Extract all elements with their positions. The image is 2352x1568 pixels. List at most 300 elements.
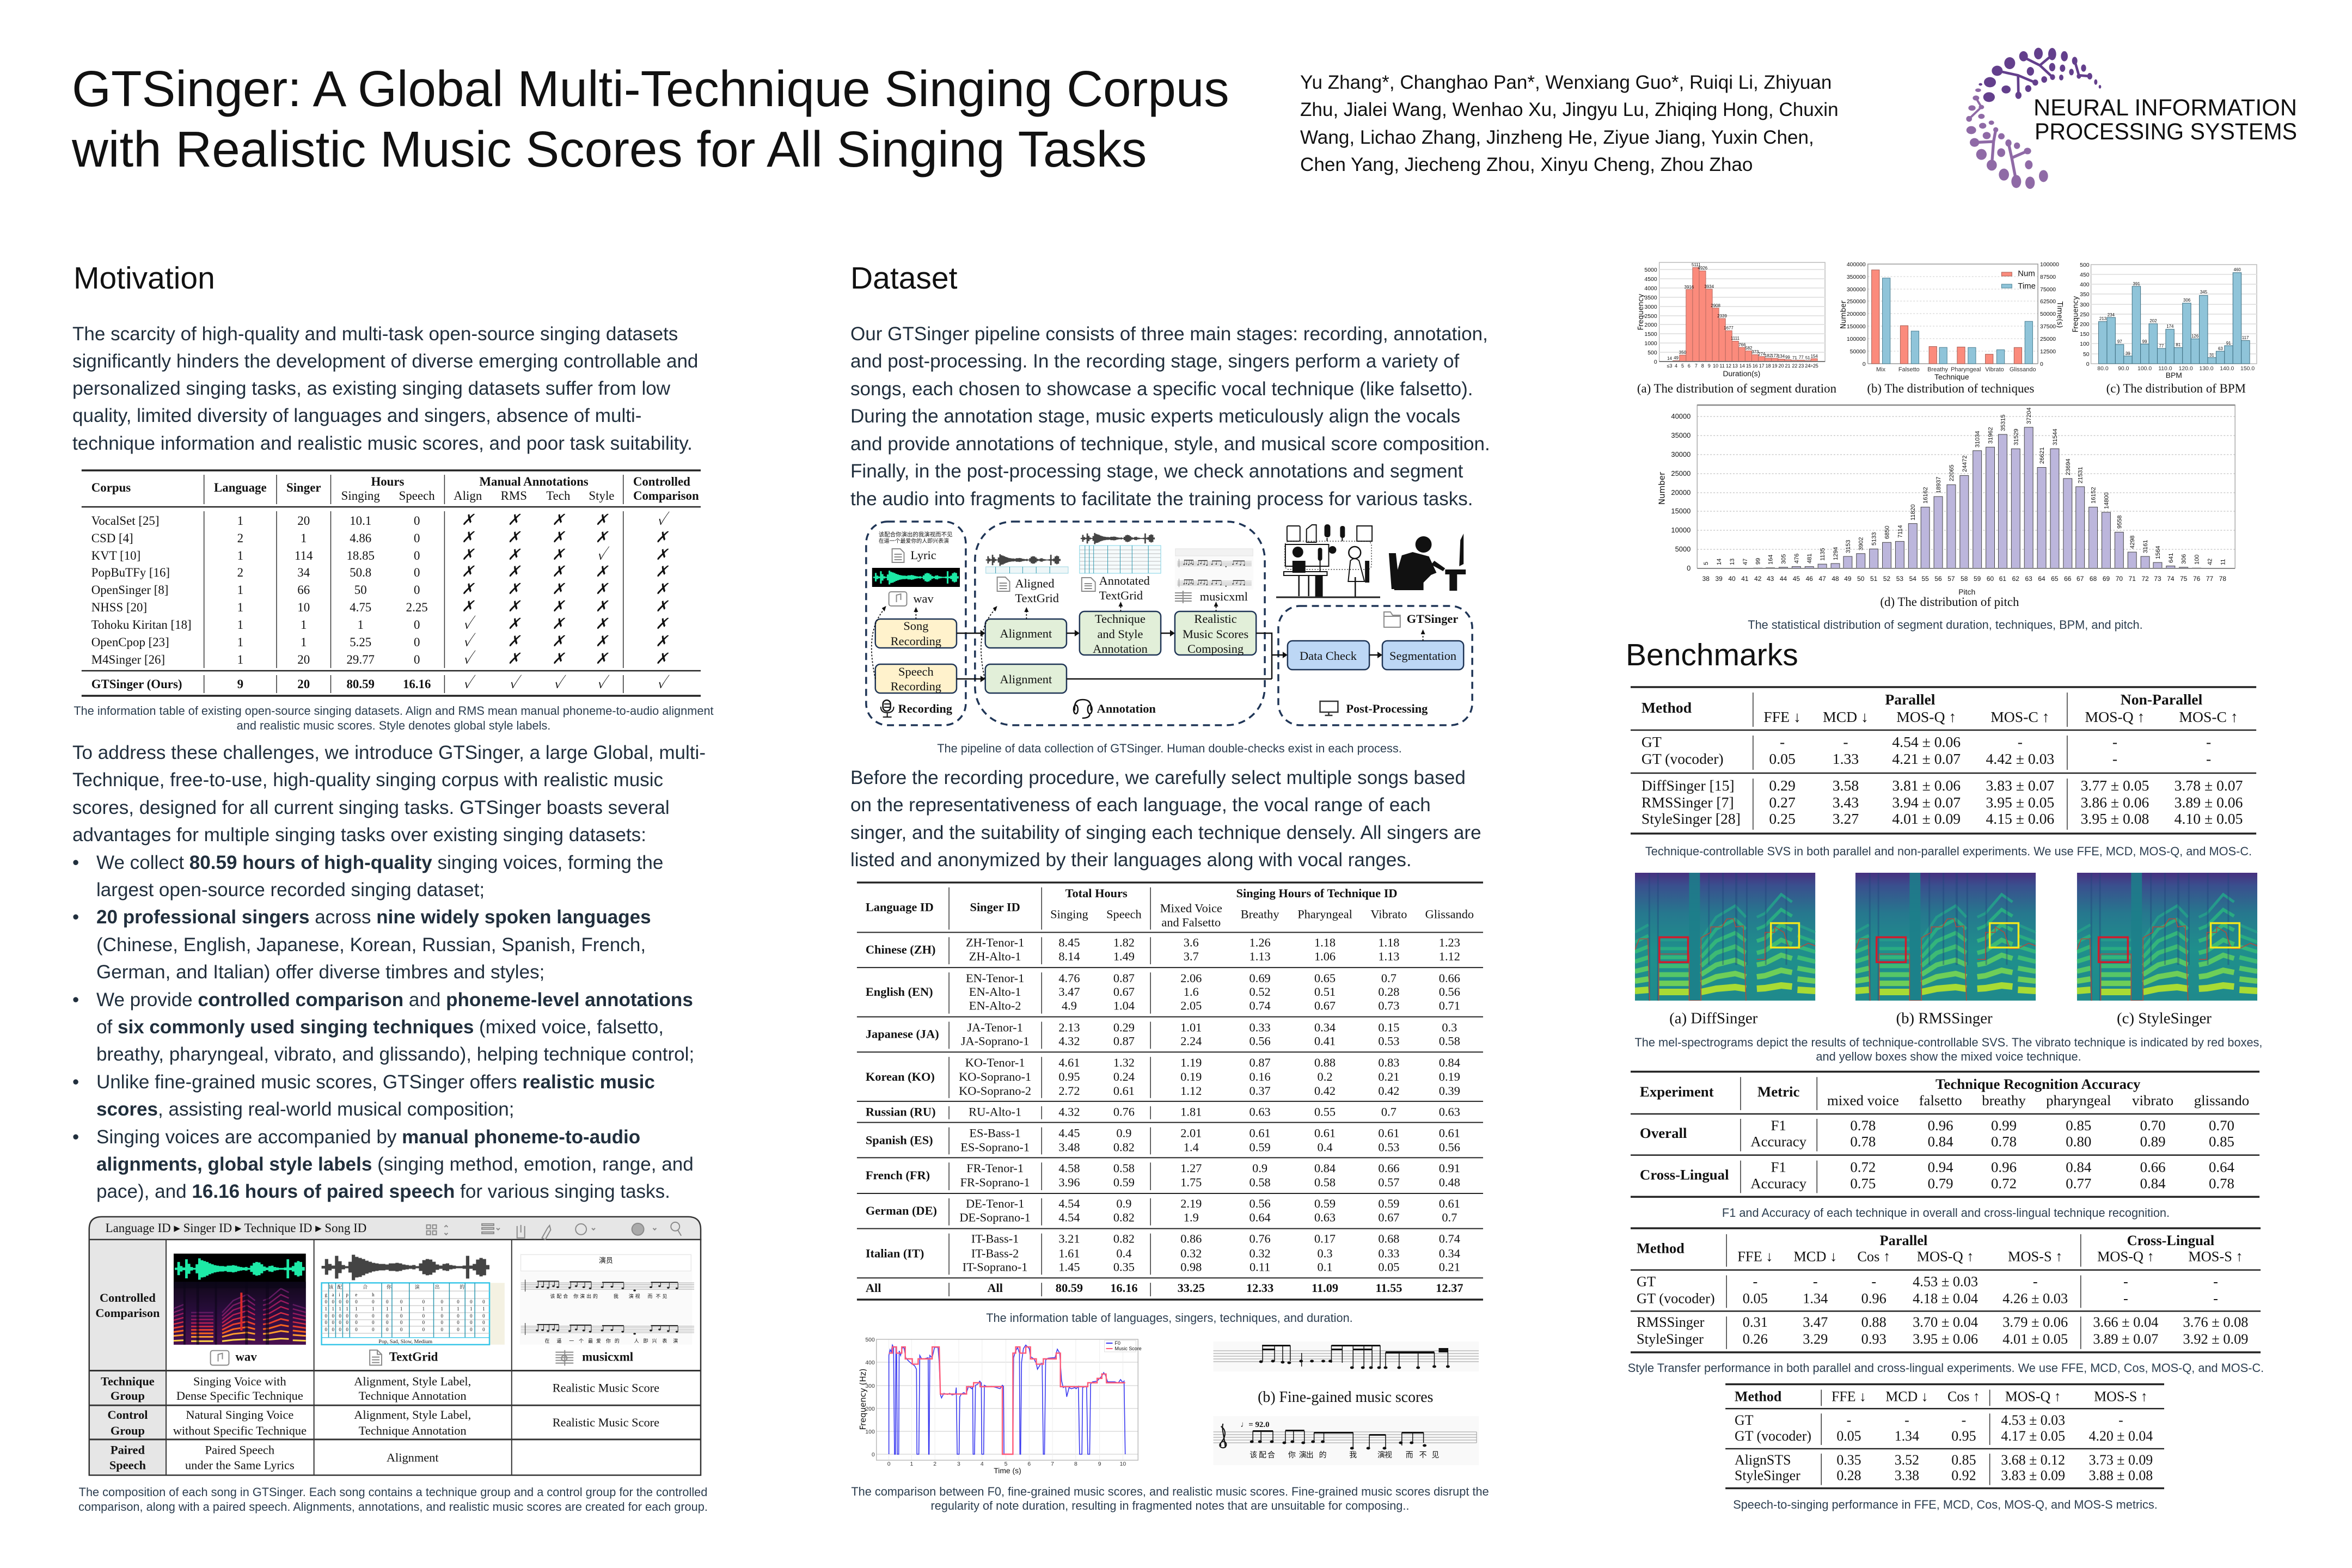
table: languages, singers, techniques, duration: 1.19	[1180, 1056, 1202, 1069]
chart (b): techniques: 50000	[1850, 349, 1866, 355]
table: style transfer: 3.29	[1803, 1331, 1828, 1347]
table: existing open-source datasets: 0	[414, 618, 420, 632]
table: technique-controllable SVS: -	[2112, 750, 2117, 767]
caption: F0 comparison: regularity of note duration, resulting in fragmented notes that are unsuitable for composing..	[931, 1499, 1409, 1512]
table: style transfer: 3.47	[1803, 1314, 1828, 1330]
chart (a): segment duration: 3000	[1644, 304, 1657, 310]
table: languages, singers, techniques, duration: 0.82	[1113, 1140, 1135, 1154]
table: technique-controllable SVS: 3.58	[1833, 777, 1859, 794]
caption: song composition	[78, 1485, 708, 1514]
text block: dataset pipeline description: During the annotation stage, music experts meticulously align the vocals	[850, 406, 1460, 427]
table: technique recognition: 0.80	[2066, 1134, 2091, 1150]
authors: Wang, Lichao Zhang, Jinzheng He, Ziyue Jiang, Yuxin Chen,	[1300, 127, 1814, 148]
chart: F0 vs music score: Time (s)	[994, 1466, 1021, 1475]
chart (d): pitch: 23694	[2065, 458, 2072, 475]
musicxml thumbnail: musicxml	[1200, 590, 1248, 603]
table: technique-controllable SVS: -	[2018, 733, 2023, 750]
table: style transfer: 3.76 ± 0.08	[2183, 1314, 2248, 1330]
chart (d): pitch: 70	[2116, 575, 2123, 583]
table: style transfer: 3.89 ± 0.07	[2093, 1331, 2158, 1347]
table: technique-controllable SVS: FFE ↓	[1763, 708, 1801, 725]
process boxes	[875, 611, 1463, 693]
chart (a): segment duration: 2339	[1717, 314, 1727, 318]
table: languages, singers, techniques, duration: 1.04	[1113, 999, 1135, 1013]
chart (b): techniques: Glissando	[2010, 366, 2036, 373]
table: existing open-source datasets: 2.25	[406, 601, 428, 614]
chart (d): pitch: 20000	[1671, 488, 1690, 497]
table: languages, singers, techniques, duration: 4.58	[1058, 1161, 1080, 1175]
chart (c): BPM: 400	[2080, 282, 2090, 288]
table: languages, singers, techniques, duration: 0.59	[1113, 1175, 1135, 1189]
chart (d): pitch: 14800	[2103, 492, 2110, 509]
panel: pipeline diagram: Alignment	[1000, 627, 1052, 640]
chart (b): techniques: 400000	[1847, 262, 1866, 268]
chart (a): segment duration: 9	[1708, 363, 1711, 369]
chart (c): BPM: 110.0	[2158, 366, 2172, 372]
sub-captions: mel-spectrograms: (b) RMSSinger	[1896, 1010, 1993, 1027]
aligned textgrid	[986, 554, 1068, 605]
table: existing open-source datasets: 1	[301, 531, 307, 545]
table: technique recognition: 0.99	[1991, 1117, 2017, 1134]
table: style transfer: -	[2213, 1273, 2218, 1289]
table: speech-to-singing: 3.68 ± 0.12	[2001, 1452, 2065, 1468]
table: languages, singers, techniques, duration: Italian (IT)	[866, 1246, 924, 1260]
table: style transfer: GT	[1637, 1273, 1656, 1289]
table: languages, singers, techniques, duration: Language ID	[866, 901, 934, 914]
chart (a): segment duration: 16	[1753, 363, 1758, 369]
chart: F0 vs music score: 500	[865, 1337, 875, 1343]
table: technique recognition: breathy	[1982, 1092, 2026, 1108]
chart (d): pitch: 0	[1687, 564, 1690, 572]
first column labels: Controlled	[100, 1291, 156, 1304]
TextGrid annotation	[322, 1255, 505, 1345]
chart (a): segment duration: 13	[1732, 363, 1738, 369]
table: languages, singers, techniques, duration: 1.12	[1439, 950, 1460, 963]
table: speech-to-singing: 0.95	[1951, 1428, 1976, 1444]
table: style transfer: -	[2123, 1290, 2128, 1306]
panel: pipeline diagram: Composing	[1187, 642, 1244, 656]
chart (a): segment duration: 1000	[1644, 341, 1657, 347]
chart: F0 vs music score: 300	[865, 1383, 875, 1389]
table: languages, singers, techniques, duration: 0.34	[1314, 1021, 1336, 1034]
table: style transfer: 3.70 ± 0.04	[1913, 1314, 1978, 1330]
table: speech-to-singing: 3.52	[1895, 1452, 1919, 1468]
table: style transfer: MOS-S ↑	[2008, 1249, 2062, 1265]
table: style transfer: 0.96	[1861, 1290, 1886, 1306]
chart (b): techniques: 300000	[1847, 287, 1866, 293]
panel: composition of each song: Natural Singing Voice	[186, 1408, 293, 1422]
chart (a): segment duration: 2500	[1644, 314, 1657, 320]
logo: NeurIPS: PROCESSING SYSTEMS	[2035, 119, 2297, 145]
chart (d): pitch: 54	[1909, 575, 1916, 583]
chart (d): pitch: 55	[1922, 575, 1929, 583]
table: languages, singers, techniques, duration: DE-Soprano-1	[959, 1211, 1031, 1224]
table: existing open-source datasets: 0	[414, 583, 420, 597]
table: languages, singers, techniques, duration: KO-Soprano-1	[959, 1070, 1031, 1083]
chart (a): segment duration: 5111	[1692, 262, 1701, 267]
table: existing open-source datasets: 0	[414, 653, 420, 666]
table: existing open-source datasets: Style	[589, 489, 614, 503]
table: languages, singers, techniques, duration: 0.74	[1250, 999, 1271, 1013]
table: technique-controllable SVS: MOS-C ↑	[2179, 708, 2238, 725]
chart (d): pitch: 62	[2012, 575, 2019, 583]
chart (c): BPM: 31	[2209, 353, 2214, 358]
legend (b): Time	[2018, 281, 2036, 291]
table: speech-to-singing: 0.92	[1951, 1468, 1976, 1484]
table: existing open-source datasets: 0	[414, 566, 420, 579]
panel: pipeline diagram: Song	[903, 619, 928, 633]
table: languages, singers, techniques, duration: ES-Soprano-1	[960, 1140, 1030, 1154]
heading: Motivation: Motivation	[74, 261, 215, 296]
panel: pipeline diagram	[866, 522, 1472, 725]
table: existing open-source datasets: 5.25	[350, 635, 371, 649]
table: technique-controllable SVS: 3.43	[1833, 794, 1859, 811]
image: realistic music score: ♩= 92.0	[1240, 1420, 1270, 1429]
table: style transfer: -	[1753, 1273, 1757, 1289]
chart: F0 vs music score: 200	[865, 1406, 875, 1412]
chart (d): pitch: 38	[1702, 575, 1710, 583]
table: style transfer: RMSSinger	[1637, 1314, 1705, 1330]
table: technique-controllable SVS: -	[1843, 733, 1848, 750]
table: languages, singers, techniques, duration: 3.96	[1058, 1175, 1080, 1189]
logo mark: purple dots	[1966, 48, 2101, 189]
chart (d): pitch: 40	[1728, 575, 1736, 583]
illustration: annotator at desk	[1389, 534, 1466, 591]
panel: composition of each song: musicxml	[582, 1350, 633, 1364]
table: technique-controllable SVS: 0.29	[1769, 777, 1796, 794]
table: languages, singers, techniques, duration: 0.56	[1439, 985, 1460, 999]
table: speech-to-singing: -	[1904, 1412, 1909, 1428]
table: technique recognition: F1	[1771, 1117, 1786, 1134]
table: languages, singers, techniques, duration: 0.69	[1250, 971, 1271, 985]
breadcrumb bar	[106, 1221, 681, 1240]
chart (d): pitch: 31544	[2052, 428, 2059, 445]
chart (a): segment duration: 7	[1695, 363, 1698, 369]
chart (a): segment duration: 77	[1799, 355, 1804, 360]
chart (b): techniques: Mix	[1876, 366, 1886, 373]
chart (d): pitch: 306	[2181, 554, 2188, 564]
chart (d): pitch: 1135	[1820, 548, 1826, 561]
table: languages, singers, techniques, duration: 1.13	[1378, 950, 1400, 963]
table: technique-controllable SVS: 3.95 ± 0.08	[2081, 810, 2149, 827]
chart (d): pitch: 58	[1961, 575, 1968, 583]
table: technique-controllable SVS: -	[2206, 733, 2211, 750]
table: languages, singers, techniques, duration: 0.1	[1318, 1260, 1333, 1273]
chart (d): pitch: 7114	[1897, 525, 1903, 538]
first column labels: Paired	[111, 1443, 145, 1457]
table: languages, singers, techniques, duration: 0.58	[1250, 1175, 1271, 1189]
chart (d): pitch: 13	[1729, 559, 1736, 565]
table: languages, singers, techniques, duration: 0.9	[1116, 1197, 1131, 1210]
text block: recording procedure: on the representativeness of each language, the vocal range of each	[850, 794, 1431, 816]
chart (d): pitch: 9558	[2116, 516, 2123, 529]
table: existing open-source datasets: Hours	[371, 475, 405, 488]
sub-captions: mel-spectrograms	[1669, 1010, 2212, 1027]
chart (d): pitch: 31034	[1975, 431, 1981, 448]
chart legend: Music Score	[1115, 1346, 1142, 1351]
table: languages, singers, techniques, duration: Total Hours	[1065, 886, 1128, 900]
chart (c): BPM: 80.0	[2097, 366, 2109, 372]
mel-spectrogram: DiffSinger	[1635, 873, 1815, 1001]
table: existing open-source datasets: 0	[414, 531, 420, 545]
table: existing open-source datasets: ✓✗✗✗✗	[463, 650, 669, 667]
text block: GTSinger introduction and bullets	[72, 742, 706, 1202]
table: languages, singers, techniques, duration: 0.68	[1378, 1232, 1400, 1246]
chart: F0 vs music score: 9	[1098, 1461, 1101, 1467]
chart: F0 vs music score: 10	[1120, 1461, 1126, 1467]
chart (a): segment duration: 2908	[1711, 303, 1721, 308]
table: speech-to-singing: 0.05	[1836, 1428, 1861, 1444]
chart (a): segment duration: 182	[1765, 353, 1772, 358]
chart (c): BPM: 450	[2080, 272, 2090, 278]
panel: composition of each song: Paired Speech	[205, 1443, 274, 1457]
table: languages, singers, techniques, duration: 0.4	[1318, 1140, 1333, 1154]
panel: composition of each song: Alignment, Style Label,	[354, 1374, 471, 1388]
table: technique recognition: 0.78	[1850, 1117, 1876, 1134]
text block: GTSinger introduction and bullets: breathy, pharyngeal, vibrato, and glissando), helping technique control;	[96, 1044, 694, 1065]
annotated textgrid: Annotated	[1099, 574, 1150, 587]
sub-captions: mel-spectrograms: (c) StyleSinger	[2117, 1010, 2212, 1027]
text block: GTSinger introduction and bullets: Singing voices are accompanied by manual phoneme-to-audio	[96, 1126, 640, 1148]
chart (c): BPM: 250	[2080, 312, 2090, 318]
chart (a): segment duration: 11	[1719, 363, 1725, 369]
table: speech-to-singing: 4.20 ± 0.04	[2089, 1428, 2153, 1444]
chart (c): BPM: 91	[2226, 341, 2231, 346]
panel: composition of each song	[89, 1217, 701, 1475]
table: speech-to-singing: 1.34	[1895, 1428, 1919, 1444]
table: languages, singers, techniques, duration: Singer ID	[970, 901, 1020, 914]
panel: composition of each song: wav	[235, 1350, 257, 1364]
table: speech-to-singing: 3.38	[1895, 1468, 1919, 1484]
table: languages, singers, techniques, duration: 0.9	[1116, 1126, 1131, 1140]
table: languages, singers, techniques, duration: 0.66	[1439, 971, 1460, 985]
chart (d): pitch: 63	[2025, 575, 2032, 583]
table: existing open-source datasets: RMS	[501, 489, 527, 503]
chart: F0 vs music score: Frequency (Hz)	[858, 1368, 868, 1430]
chart (d): pitch: 16162	[1922, 487, 1929, 504]
chart (c): BPM: 200	[2080, 322, 2090, 328]
image: fine-grained music score	[1214, 1342, 1479, 1371]
chart (d): pitch	[1657, 405, 2235, 596]
icon: wav file	[211, 1351, 229, 1365]
table: languages, singers, techniques, duration: 0.56	[1439, 1140, 1460, 1154]
TextGrid annotation: Pop, Sad, Slow, Medium	[378, 1339, 432, 1345]
panel: pipeline diagram: Realistic	[1194, 612, 1237, 626]
first column labels: Comparison	[95, 1306, 160, 1320]
chart (c): BPM: 500	[2080, 262, 2090, 268]
table: languages, singers, techniques, duration: 0.48	[1439, 1175, 1460, 1189]
table: existing open-source datasets: GTSinger (Ours)	[91, 677, 182, 691]
text block: GTSinger introduction and bullets: Unlike fine-grained music scores, GTSinger offers realistic music	[96, 1071, 655, 1093]
chart (a): segment duration: 15	[1746, 363, 1751, 369]
chart (d): pitch: 61	[1999, 575, 2006, 583]
table: languages, singers, techniques, duration: 0.66	[1378, 1161, 1400, 1175]
panel: composition of each song: Technique Annotation	[359, 1424, 467, 1437]
table: languages, singers, techniques, duration: 0.24	[1113, 1070, 1135, 1083]
table: speech-to-singing: FFE ↓	[1832, 1388, 1866, 1404]
chart (d): pitch: 1294	[1833, 547, 1839, 560]
chart (d): pitch: 15000	[1671, 507, 1690, 515]
chart (d): pitch: Pitch	[1958, 587, 1975, 596]
chart (d): pitch: 11	[2220, 559, 2226, 565]
table: existing open-source datasets: Comparison	[633, 489, 699, 503]
chart: F0 vs music score: 4	[981, 1461, 984, 1467]
table: languages, singers, techniques, duration: 0.67	[1113, 985, 1135, 999]
chart (d): pitch: 57	[1947, 575, 1955, 583]
chart (d): pitch: 66	[2064, 575, 2072, 583]
chart (a): segment duration	[1637, 262, 1825, 378]
chart (a): segment duration: 350	[1679, 350, 1687, 355]
TextGrid annotation: 0000000000000	[325, 1313, 485, 1319]
chart (d): pitch: 164	[1768, 555, 1774, 565]
text block: GTSinger introduction and bullets: scores, assisting real-world musical composition;	[96, 1099, 514, 1120]
chart (d): pitch: 18937	[1935, 476, 1942, 493]
table: existing open-source datasets: KVT [10]	[91, 549, 140, 562]
table: technique recognition: 0.79	[1928, 1175, 1953, 1191]
caption: mel-spectrograms: and yellow boxes show the mixed voice technique.	[1816, 1050, 2081, 1063]
caption (d): (d) The distribution of pitch	[1880, 595, 2019, 609]
table: languages, singers, techniques, duration: 0.15	[1378, 1021, 1400, 1034]
chart: F0 vs music score: 6	[1027, 1461, 1031, 1467]
chart (a): segment duration: 19	[1772, 363, 1778, 369]
table: languages, singers, techniques, duration: 1.49	[1113, 950, 1135, 963]
table: speech-to-singing: Method	[1735, 1388, 1782, 1404]
table: languages, singers, techniques, duration: 2.01	[1180, 1126, 1202, 1140]
table: existing open-source datasets: 114	[295, 549, 313, 562]
table: languages, singers, techniques, duration: 0.82	[1113, 1232, 1135, 1246]
chart (a): segment duration: 1111	[1731, 336, 1739, 341]
chart (a): segment duration: 3934	[1704, 284, 1714, 289]
table: speech-to-singing: 3.83 ± 0.09	[2001, 1468, 2065, 1484]
chart (a): segment duration: 6	[1688, 363, 1690, 369]
table: technique-controllable SVS: GT	[1641, 733, 1662, 750]
first column labels: Technique	[101, 1374, 155, 1388]
caption: F0 comparison: The comparison between F0, fine-grained music scores, and realistic music scores. Fine-grained music scores disrupt the	[851, 1485, 1489, 1498]
table: languages, singers, techniques, duration: 0.61	[1113, 1084, 1135, 1098]
table: technique recognition: 0.85	[2066, 1117, 2091, 1134]
table: technique recognition: 0.78	[2209, 1175, 2234, 1191]
chart (a): segment duration: 22	[1792, 363, 1797, 369]
table: speech-to-singing: 0.28	[1836, 1468, 1861, 1484]
table: technique-controllable SVS: 4.21 ± 0.07	[1892, 750, 1961, 767]
text block: motivation intro: personalized singing tasks, as existing singing datasets suffer from low	[72, 378, 671, 399]
table: languages, singers, techniques, duration: 11.55	[1375, 1281, 1402, 1295]
chart (a): segment duration: 4	[1675, 363, 1677, 369]
table: technique recognition: Technique Recognition Accuracy	[1935, 1076, 2141, 1092]
chart (c): BPM: 100.0	[2137, 366, 2152, 372]
table: languages, singers, techniques, duration: Singing	[1050, 908, 1088, 921]
table: languages, singers, techniques, duration: FR-Tenor-1	[966, 1161, 1024, 1175]
caption: pipeline: The pipeline of data collection of GTSinger. Human double-checks exist in each process.	[937, 742, 1402, 755]
chart (d): pitch: 68	[2090, 575, 2097, 583]
chart (d): pitch: 47	[1818, 575, 1826, 583]
chart (c): BPM: 39	[2126, 351, 2130, 356]
chart (b): techniques: Time(s)	[2055, 301, 2063, 328]
table: style transfer: 0.93	[1861, 1331, 1886, 1347]
table: technique-controllable SVS: MOS-Q ↑	[1896, 708, 1956, 725]
table: style transfer: 0.26	[1743, 1331, 1768, 1347]
table: speech-to-singing: -	[2118, 1412, 2123, 1428]
table: existing open-source datasets: 20	[297, 677, 310, 691]
image: realistic music score: 该配合你演出的我演视而不见	[1250, 1449, 1439, 1460]
chart (c): BPM: 150.0	[2240, 366, 2255, 372]
table: style transfer: Cos ↑	[1857, 1249, 1890, 1265]
table: languages, singers, techniques, duration: ZH-Tenor-1	[966, 935, 1024, 949]
table: existing open-source datasets: 0	[414, 549, 420, 562]
table: style transfer: MOS-S ↑	[2188, 1249, 2243, 1265]
table: existing open-source datasets: Align	[454, 489, 482, 503]
chart (d): pitch: 4298	[2129, 536, 2136, 549]
chart (d): pitch: 76	[2193, 575, 2201, 583]
table: technique-controllable SVS: MCD ↓	[1823, 708, 1869, 725]
annotated textgrid: TextGrid	[1099, 589, 1143, 602]
table: existing open-source datasets	[82, 470, 701, 696]
chart (d): pitch: 46	[1806, 575, 1813, 583]
table: languages, singers, techniques, duration: 3.47	[1058, 985, 1080, 999]
table: languages, singers, techniques, duration: 0.71	[1439, 999, 1460, 1013]
chart (d): pitch: 39	[1715, 575, 1723, 583]
table: technique recognition: 0.64	[2209, 1159, 2235, 1175]
chart: F0 vs music score: 8	[1074, 1461, 1077, 1467]
chart (a): segment duration: 14	[1667, 356, 1673, 361]
table: existing open-source datasets: 50	[354, 583, 367, 597]
table: languages, singers, techniques, duration: 0.2	[1318, 1070, 1333, 1083]
table: languages, singers, techniques, duration: 4.45	[1058, 1126, 1080, 1140]
table: style transfer: MOS-Q ↑	[2097, 1249, 2154, 1265]
recording inputs: 该配合你演出的我演视而不见	[879, 530, 952, 538]
table: languages, singers, techniques, duration: 8.14	[1058, 950, 1080, 963]
table: languages, singers, techniques, duration: 1.9	[1184, 1211, 1199, 1224]
table: technique-controllable SVS: 4.15 ± 0.06	[1986, 810, 2054, 827]
table: languages, singers, techniques, duration: 0.42	[1378, 1084, 1400, 1098]
wav spectrogram	[174, 1254, 306, 1345]
table: languages, singers, techniques, duration: Japanese (JA)	[866, 1027, 939, 1040]
first column labels: Group	[111, 1389, 145, 1402]
table: technique recognition: 0.96	[1991, 1159, 2017, 1175]
table: existing open-source datasets: 16.16	[403, 677, 431, 691]
table: languages, singers, techniques, duration: 1.6	[1184, 985, 1199, 999]
table: languages, singers, techniques, duration: 0.4	[1116, 1246, 1131, 1260]
table: languages, singers, techniques, duration: 0.35	[1113, 1260, 1135, 1273]
chart (d): pitch: 42	[1754, 575, 1762, 583]
table: technique recognition: mixed voice	[1827, 1092, 1899, 1108]
chart (b): techniques: 0	[1863, 362, 1866, 367]
table: existing open-source datasets: ✗✗✗✗✗	[462, 581, 669, 598]
heading: Dataset: Dataset	[850, 261, 958, 296]
table: languages, singers, techniques, duration: 2.13	[1058, 1021, 1080, 1034]
table: languages, singers, techniques, duration: 2.24	[1180, 1034, 1202, 1048]
chart (a): segment duration: 14	[1739, 363, 1745, 369]
chart (d): pitch: 75	[2180, 575, 2188, 583]
table: technique-controllable SVS: Non-Parallel	[2121, 691, 2203, 708]
recording inputs: wav	[913, 592, 934, 605]
table: existing open-source datasets: Tech	[546, 489, 571, 503]
table: style transfer: Cross-Lingual	[2127, 1233, 2214, 1248]
table: languages, singers, techniques, duration: ES-Bass-1	[969, 1126, 1021, 1140]
table: technique-controllable SVS: 1.33	[1833, 750, 1859, 767]
table: languages, singers, techniques, duration: 0.59	[1314, 1197, 1336, 1210]
table: style transfer: -	[2033, 1273, 2038, 1289]
text block: motivation intro: technique information and realistic music scores, and poor task suitability.	[72, 433, 693, 454]
table: languages, singers, techniques, duration: 0.63	[1250, 1105, 1271, 1119]
table: technique recognition: 0.77	[2066, 1175, 2091, 1191]
table: languages, singers, techniques, duration: 0.33	[1250, 1021, 1271, 1034]
figure: statistical distributions	[1637, 262, 2257, 609]
table: technique recognition: 0.96	[1928, 1117, 1953, 1134]
table: speech-to-singing: -	[1847, 1412, 1851, 1428]
chart (d): pitch: 73	[2154, 575, 2161, 583]
table: technique-controllable SVS: RMSSinger [7]	[1641, 794, 1734, 811]
